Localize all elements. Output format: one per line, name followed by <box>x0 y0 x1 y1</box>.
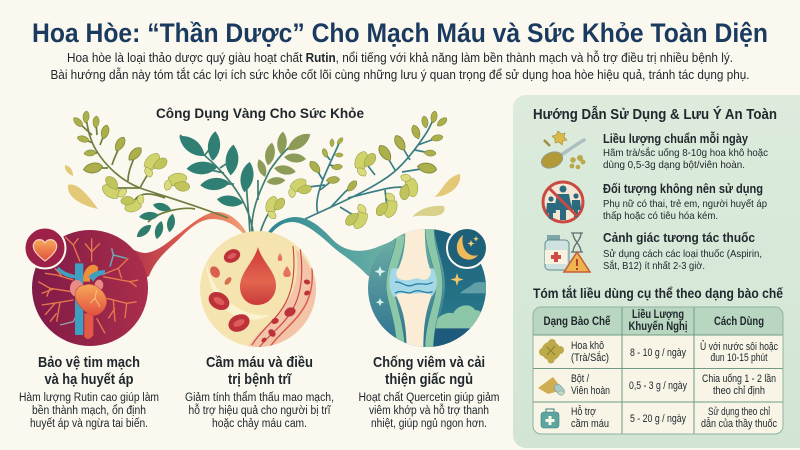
row: hemostasis support: cầm máu <box>571 418 609 430</box>
benefit 2 text: Giảm tính thẩm thấu mao mạch, <box>185 392 334 404</box>
icon: first aid kit <box>541 409 559 428</box>
row: hemostasis support: Hỗ trợ <box>571 405 596 418</box>
icon: powder and pills <box>538 377 566 397</box>
item 1 text <box>603 131 768 171</box>
intro text <box>50 50 750 82</box>
circle: joint and sleep <box>368 229 486 347</box>
benefit 3 text: viêm khớp và hỗ trợ thanh <box>369 404 489 417</box>
table header: Liều Lượng <box>632 309 684 321</box>
row: powder <box>538 373 776 397</box>
icon: dried flowers <box>539 339 564 364</box>
icon: not allowed people <box>543 182 583 222</box>
benefit 1 text: Hàm lượng Rutin cao giúp làm <box>19 392 159 404</box>
row: powder: Chia uống 1 - 2 lần <box>702 373 776 385</box>
section heading: benefits: Công Dụng Vàng Cho Sức Khỏe <box>156 105 364 121</box>
panel: usage and safety <box>513 95 800 448</box>
benefit 3 text: Chống viêm và cải <box>373 354 485 371</box>
row: dried flower: đun 10-15 phút <box>710 352 768 364</box>
benefit 3 text <box>358 354 500 430</box>
badge: moon <box>447 228 487 268</box>
table header: Dạng Bào Chế <box>544 316 611 328</box>
table header: Cách Dùng <box>714 316 764 328</box>
row: hemostasis support: dẫn của thầy thuốc <box>701 417 777 430</box>
row: dried flower: Hoa khô <box>571 340 604 352</box>
item 1 text: dùng 0,5-3g dạng bột/viên hoàn. <box>603 159 745 171</box>
benefit 3 text: nhiệt, giúp ngủ ngon hơn. <box>371 418 487 430</box>
benefit 1 text: bền thành mạch, ổn định <box>32 405 146 417</box>
gold petals left <box>65 165 98 209</box>
intro text: Bài hướng dẫn này tóm tắt các lợi ích sức khỏe cốt lõi cùng những lưu ý quan trọng để sử dụng hoa hòe hiệu quả, tránh tác dụng phụ. <box>50 67 750 82</box>
row: powder: Bột / <box>571 373 590 385</box>
item 1 text: Hãm trà/sắc uống 8-10g hoa khô hoặc <box>603 146 768 159</box>
item 2 text: Đối tượng không nên sử dụng <box>603 182 763 196</box>
blood drop <box>240 247 276 305</box>
item 1 text: Liều lượng chuẩn mỗi ngày <box>603 131 748 146</box>
row: dried flower: 8 - 10 g / ngày <box>630 347 686 359</box>
right flowering branch <box>263 111 449 300</box>
icon: medicine and warning <box>545 233 590 272</box>
benefit 2 text: hoặc chảy máu cam. <box>212 418 307 430</box>
icon: spoon with herbs <box>539 131 586 171</box>
row: dried flower <box>539 339 778 364</box>
benefit 2 text: trị bệnh trĩ <box>228 371 292 388</box>
item 3 text: Sử dụng cách các loại thuốc (Aspirin, <box>603 248 762 260</box>
item 3 text <box>603 231 762 272</box>
illustration: branches <box>65 111 460 300</box>
badge: heart <box>24 228 66 268</box>
item 3 text: Cảnh giác tương tác thuốc <box>603 231 755 245</box>
benefit 1 text: Bảo vệ tim mạch <box>38 354 140 371</box>
gold petals right <box>412 174 460 217</box>
left flowering branch <box>72 111 253 290</box>
row: dried flower: (Trà/Sắc) <box>571 351 609 364</box>
table header <box>544 309 764 333</box>
row: hemostasis support: 5 - 20 g / ngày <box>630 413 686 425</box>
benefit 1 text: huyết áp và ngừa tai biến. <box>30 418 148 430</box>
benefit 2 text: Cầm máu và điều <box>206 354 313 371</box>
circle: blood clotting <box>200 231 320 350</box>
center leaf branch <box>175 130 313 245</box>
row: powder: theo chỉ định <box>713 385 765 397</box>
row: powder: 0,5 - 3 g / ngày <box>629 380 687 392</box>
dosage table <box>533 307 783 434</box>
benefit 1 text <box>19 354 159 430</box>
row: dried flower: Ủ với nước sôi hoặc <box>700 340 778 353</box>
benefit 3 text: Hoạt chất Quercetin giúp giảm <box>358 392 500 404</box>
row: powder: Viên hoàn <box>571 385 610 397</box>
table header: Khuyến Nghị <box>628 321 688 333</box>
row: hemostasis support: Sử dụng theo chỉ <box>708 406 770 418</box>
benefit 3 text: thiện giấc ngủ <box>385 371 473 388</box>
item 2 text: Phụ nữ có thai, trẻ em, người huyết áp <box>603 198 767 210</box>
item 2 text: thấp hoặc có tiêu hóa kém. <box>603 210 718 222</box>
intro text: Hoa hòe là loại thảo dược quý giàu hoạt chất Rutin, nổi tiếng với khả năng làm bền thành mạch và hỗ trợ điều trị nhiều bệnh lý. <box>67 50 733 65</box>
item 2 text <box>603 182 767 222</box>
item 3 text: Sắt, B12) ít nhất 2-3 giờ. <box>603 259 705 272</box>
row: hemostasis support <box>541 405 777 430</box>
circle: heart and blood vessels <box>24 228 148 346</box>
benefit 2 text: hỗ trợ hiệu quả cho người bị trĩ <box>188 404 331 417</box>
benefit 1 text: và hạ huyết áp <box>44 371 134 388</box>
benefit 2 text <box>185 354 334 430</box>
